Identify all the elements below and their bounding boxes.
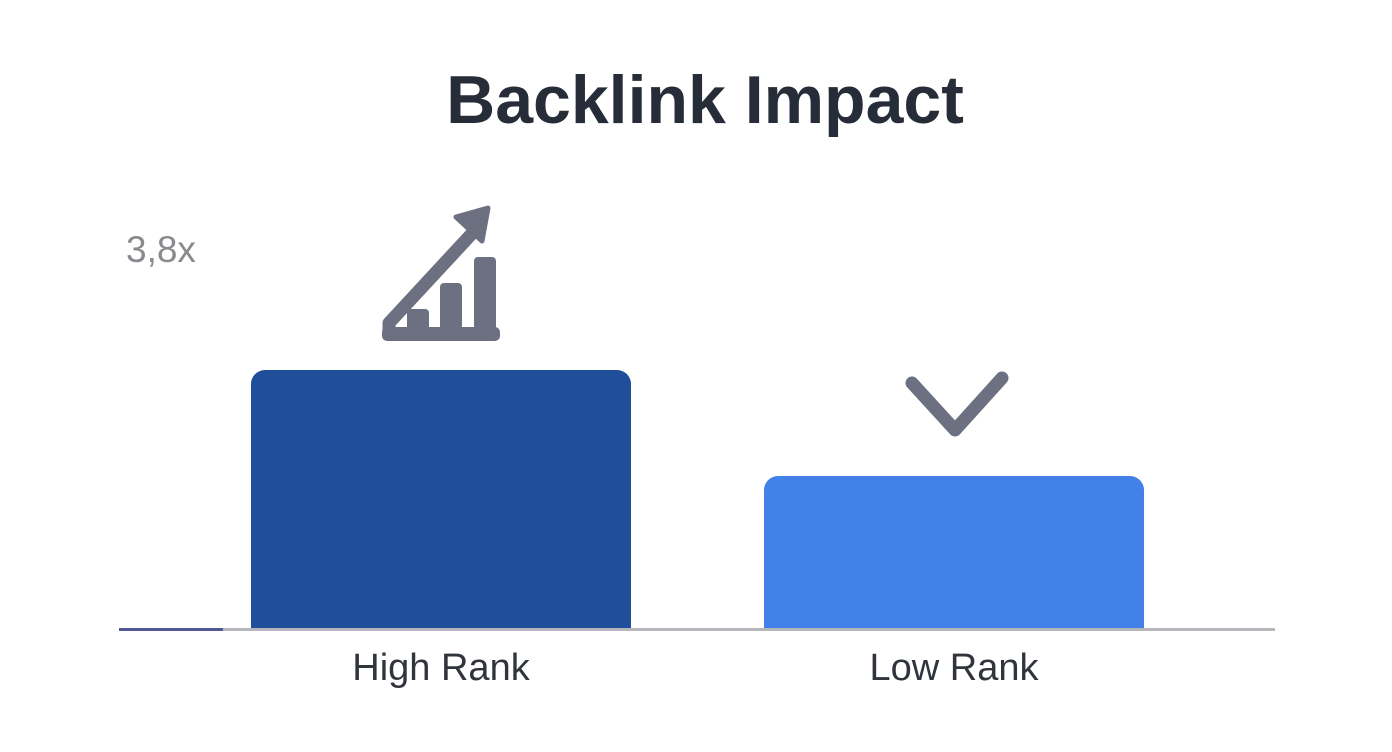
value label: 3,8x: 3,8x: [126, 229, 196, 270]
icon: check mark: [906, 372, 1008, 436]
icon: rising chart: [382, 206, 500, 341]
baseline axis: [119, 628, 1275, 631]
bar: Low Rank: [764, 476, 1144, 629]
label: High Rank: High Rank: [352, 647, 530, 689]
title: Backlink Impact: [446, 62, 964, 138]
label: Low Rank: Low Rank: [870, 647, 1038, 689]
bar: High Rank: [251, 370, 631, 629]
